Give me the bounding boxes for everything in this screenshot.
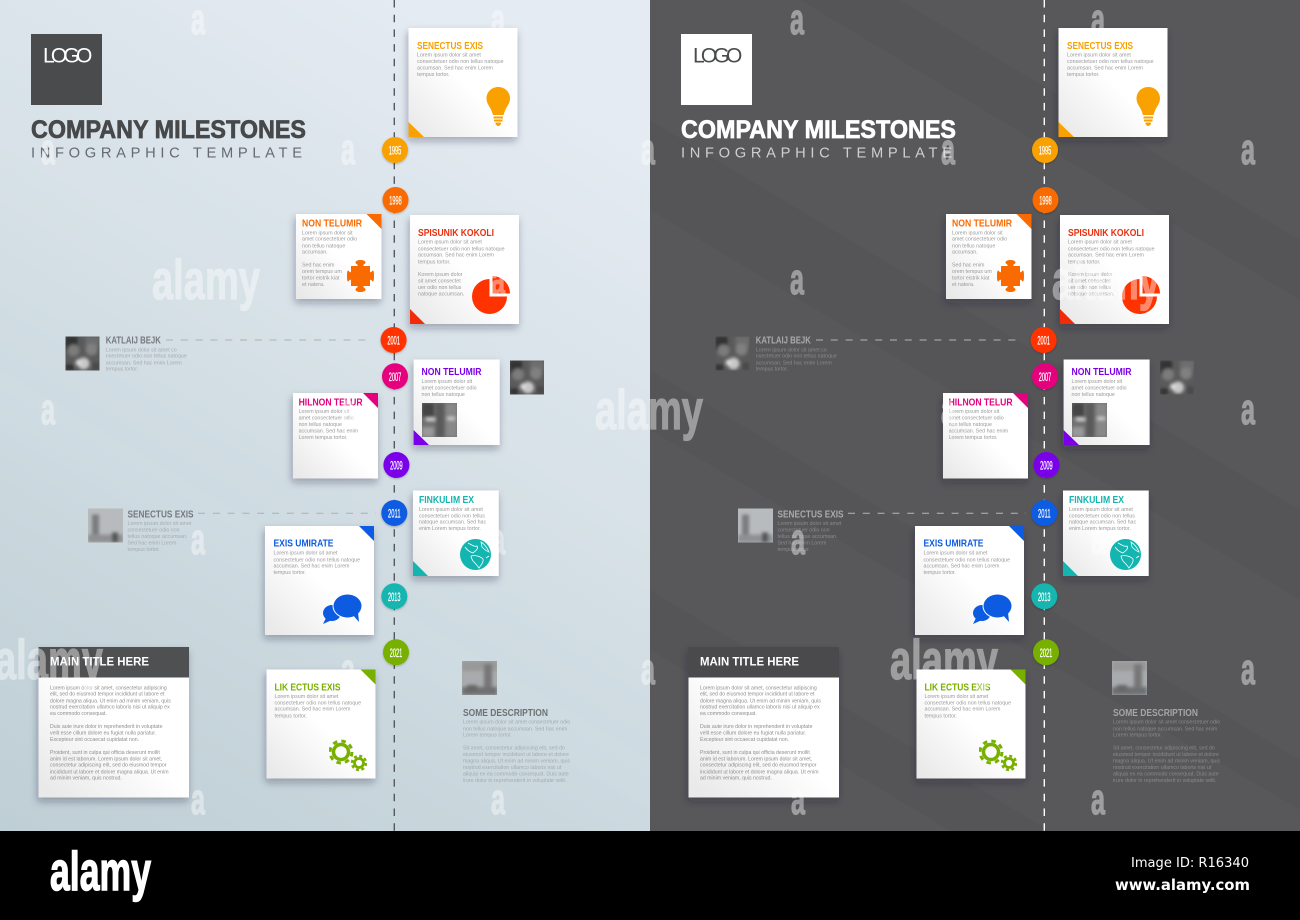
card: Non Telumir orange: NON TELUMIR [302, 218, 362, 230]
side note: Senectus Exis: tempus tortor. [128, 547, 160, 553]
card: Hilnon Telur dark: non tellus natoque [949, 422, 992, 428]
card: Non Telumir orange [296, 214, 382, 299]
card: Hilnon Telur: amet consectetuer odio [299, 416, 354, 422]
card: Spisunik Kokoli dark: consectetuer odio non tellus natoque [1068, 246, 1155, 252]
card: Exis Umirate dark: tempus tortor. [924, 570, 956, 576]
year 2001: 2001 [387, 336, 400, 348]
watermark overlay: a [491, 255, 505, 304]
watermark overlay: a [41, 385, 55, 434]
card: Lik Ectus Exis: accumsan. Sed hac enim Lorem [274, 707, 351, 713]
box: main title dark: ea commodo consequat. [700, 711, 757, 717]
icon: globe [460, 539, 491, 570]
side note: Some Description: aliquip ex ea commodo consequat. Duis aute [463, 771, 569, 777]
card: Senectus Exis dark: SENECTUS EXIS [1067, 40, 1133, 52]
year 2001 dark [1031, 327, 1057, 353]
card: Senectus Exis: Lorem ipsum dolor sit amet [417, 52, 481, 58]
year 1995 dark [1032, 137, 1058, 163]
card: Non Telumir orange: orem tempus um [302, 269, 342, 275]
card: Non Telumir orange dark: amet consectetuer odio [952, 237, 1007, 243]
side note: Some Description: SOME DESCRIPTION [463, 707, 548, 719]
card: Non Telumir orange: et natera. [302, 282, 324, 288]
box: main title: consectetur adipiscing elit, sed do eiusmod tempor [50, 763, 167, 769]
year 2013 [381, 583, 407, 609]
card: Hilnon Telur dark: accumsan. Sed hac enim [949, 428, 1009, 434]
watermark overlay: alamy [1052, 248, 1160, 311]
box: main title: ad minim veniam, quis nostrud. [50, 776, 122, 782]
card: Hilnon Telur dark [943, 393, 1028, 478]
box: main title: dolore magna aliqua. Ut enim ad minim veniam, quis [50, 698, 171, 704]
card: Exis Umirate: consectetuer odio non tellus natoque [274, 557, 360, 563]
watermark overlay: a [641, 645, 655, 694]
card: Non Telumir orange dark: Sed hac enim [952, 263, 985, 269]
box: main title dark: Excepteur sint occaecat cupidatat non. [700, 737, 789, 743]
card: Spisunik Kokoli: Korem ipsum dolor [418, 272, 463, 278]
year markers: dark [1031, 137, 1059, 665]
card: Spisunik Kokoli dark: uer odio non tellus [1068, 285, 1112, 291]
logo box: LOGO [43, 44, 92, 68]
subtitle: INFOGRAPHIC TEMPLATE [31, 146, 302, 162]
logo box dark [681, 34, 752, 105]
card: Finkulim Ex dark [1063, 490, 1149, 576]
card: Exis Umirate: accumsan. Sed hac enim Lorem [274, 564, 350, 570]
card: Finkulim Ex dark: enim Lorem tempus tortor. [1069, 526, 1131, 532]
card: Spisunik Kokoli: natoque accumsan. [418, 291, 464, 297]
box: main title dark: incididunt ut labore et dolore magna aliqua. Ut enim [700, 769, 819, 775]
card: Non Telumir orange dark: orem tempus um [952, 269, 992, 275]
icon: puzzle dark [997, 260, 1024, 292]
box: main title: Duis aute irure dolor in reprehenderit in voluptate [50, 724, 163, 730]
card: Spisunik Kokoli dark: sit amet consectet [1068, 279, 1111, 285]
watermark overlay: a [491, 775, 505, 824]
side note: Some Description: nostrud exercitation ullamco laboris nisi ut [463, 765, 562, 771]
watermark overlay: a [1241, 125, 1255, 174]
card: Hilnon Telur: HILNON TELUR [299, 397, 363, 409]
card: Senectus Exis: accumsan. Sed hac enim Lorem [417, 65, 494, 71]
side note: Senectus Exis: Sed hac enim Lorem [128, 541, 177, 547]
year 2007: 2007 [389, 372, 401, 384]
year 2011 dark [1031, 500, 1057, 526]
side note: Some Description dark: nostrud exercitation ullamco laboris nisi ut [1113, 765, 1212, 771]
side note: Katlaij Bejk: Lorem ipsum dolor sit amet co [106, 347, 177, 353]
connector: Katlaij [166, 339, 372, 341]
year 2001 [381, 327, 407, 353]
year 2011 dark: 2011 [1038, 508, 1051, 520]
side note: Some Description: Lorem tempus tortor. [463, 733, 512, 739]
timeline axis: light [393, 0, 395, 831]
side note: Katlaij Bejk dark [716, 334, 837, 373]
card: Senectus Exis: tempus tortor. [417, 72, 449, 78]
card: Exis Umirate dark: EXIS UMIRATE [924, 538, 984, 550]
side note: Some Description: non tellus natoque accumsan. Sed hac enim [463, 726, 568, 732]
year 1998 dark [1032, 187, 1058, 213]
side note: Katlaij Bejk dark: accumsan. Sed hac enim Lorem [756, 360, 832, 366]
card: Hilnon Telur: Lorem tempus tortor. [299, 435, 347, 441]
box: main title: Proident, sunt in culpa qui officia deserunt mollit [50, 750, 160, 756]
card: Senectus Exis: SENECTUS EXIS [417, 40, 483, 52]
card: Non Telumir orange dark: Lorem ipsum dolor sit [952, 230, 1003, 236]
card: Non Telumir purple [414, 360, 500, 445]
card: Spisunik Kokoli dark: natoque accumsan. [1068, 291, 1114, 297]
box: main title: ea commodo consequat. [50, 711, 107, 717]
side note: Some Description dark: eiusmod tempor incididunt ut labore et dolore [1113, 752, 1219, 758]
card: Hilnon Telur: Lorem ipsum dolor sit [299, 409, 350, 415]
watermark overlay: a [790, 255, 804, 304]
card: Non Telumir purple dark: NON TELUMIR [1072, 366, 1132, 378]
subtitle dark: INFOGRAPHIC TEMPLATE [681, 146, 952, 162]
card: Non Telumir purple dark [1064, 360, 1150, 445]
watermark overlay: a [1241, 385, 1255, 434]
card: Exis Umirate: Lorem ipsum dolor sit amet [274, 551, 338, 557]
year 2013 dark: 2013 [1038, 592, 1051, 604]
image id: Image ID: R16340 [1131, 855, 1249, 871]
box: main title: anim id est laborum. Lorem ipsum dolor sit amet, [50, 756, 162, 762]
box: main title dark: Lorem ipsum dolor sit amet, consectetur adipiscing [700, 685, 817, 691]
timeline axis: dark [1043, 0, 1045, 831]
card: Senectus Exis: consectetuer odio non tellus natoque [417, 59, 504, 65]
card: Spisunik Kokoli dark: Korem ipsum dolor [1068, 272, 1113, 278]
card: Spisunik Kokoli: uer odio non tellus [418, 285, 462, 291]
title dark: COMPANY MILESTONES [681, 116, 956, 144]
box: main title dark: consectetur adipiscing elit, sed do eiusmod tempor [700, 763, 817, 769]
watermark overlay: a [1091, 515, 1105, 564]
card: Finkulim Ex dark: Lorem ipsum dolor sit amet [1069, 507, 1133, 513]
year 2021: 2021 [390, 648, 402, 660]
card: Senectus Exis dark: Lorem ipsum dolor sit amet [1067, 52, 1131, 58]
card: Senectus Exis dark: tempus tortor. [1067, 72, 1099, 78]
year 2009 dark [1033, 452, 1059, 478]
card: Non Telumir orange dark: et natera. [952, 282, 974, 288]
side note: Senectus Exis dark: Lorem ipsum dolor sit amet [778, 521, 842, 527]
card: Spisunik Kokoli: Lorem ipsum dolor sit amet [418, 240, 482, 246]
website: www.alamy.com [1115, 876, 1250, 894]
side note: Senectus Exis dark: tellus natoque accumsan. [778, 534, 838, 540]
box: main title: velit esse cillum dolore eu fugiat nulla pariatur. [50, 731, 156, 737]
icon: gears [330, 741, 366, 770]
watermark overlay: a [791, 775, 805, 824]
year 2011: 2011 [388, 508, 401, 520]
card: Spisunik Kokoli: tempus tortor. [418, 259, 450, 265]
year 2009 [383, 452, 409, 478]
watermark overlay: a [941, 125, 955, 174]
year 1998: 1998 [389, 196, 402, 208]
side note: Katlaij Bejk [66, 334, 187, 373]
watermark overlay: a [491, 515, 505, 564]
infographic: dark version [681, 0, 1221, 831]
side note: Some Description [462, 661, 571, 784]
card: Spisunik Kokoli dark: accumsan. Sed hac enim Lorem [1068, 253, 1145, 259]
box: main title dark: MAIN TITLE HERE [700, 654, 799, 668]
watermark overlay: a [641, 125, 655, 174]
title: COMPANY MILESTONES [31, 116, 306, 144]
card: Lik Ectus Exis dark: tempus tortor. [924, 713, 957, 719]
side note: Senectus Exis dark: Sed hac enim Lorem [778, 541, 827, 547]
side note: Some Description dark: aliquip ex ea commodo consequat. Duis aute [1113, 771, 1219, 777]
watermark overlay: alamy [152, 248, 260, 311]
side note: Senectus Exis dark: tempus tortor. [778, 547, 810, 553]
watermark overlay: a [341, 385, 355, 434]
card: Spisunik Kokoli: SPISUNIK KOKOLI [418, 227, 494, 239]
side note: Senectus Exis [88, 508, 194, 553]
card: Non Telumir orange: Lorem ipsum dolor sit [302, 230, 353, 236]
card: Spisunik Kokoli dark: tempus tortor. [1068, 259, 1100, 265]
watermark overlay: a [1241, 645, 1255, 694]
card: Non Telumir orange dark [946, 214, 1032, 299]
year 1995 dark: 1995 [1039, 146, 1051, 158]
footer logo: alamy [50, 840, 151, 902]
card: Exis Umirate: EXIS UMIRATE [274, 538, 334, 550]
side note: Katlaij Bejk dark: KATLAIJ BEJK [756, 334, 811, 346]
icon: light bulb dark [1136, 87, 1160, 126]
card: Non Telumir purple dark: amet consectetuer odio [1072, 385, 1127, 391]
card: Hilnon Telur [293, 393, 378, 478]
icon: pie chart [472, 276, 510, 314]
year 1995: 1995 [389, 146, 401, 158]
icon: chat bubbles [323, 594, 362, 624]
year 1995 [382, 137, 408, 163]
box: main title dark: Duis aute irure dolor in reprehenderit in voluptate [700, 724, 813, 730]
watermark overlay: a [191, 515, 205, 564]
box: main title: incididunt ut labore et dolore magna aliqua. Ut enim [50, 769, 169, 775]
side note: Some Description dark: Lorem ipsum dolor sit amet consectetuer odio [1113, 720, 1220, 726]
card: Non Telumir orange: tortor eistrik kiat [302, 275, 340, 281]
card: Non Telumir orange dark: accumsan. [952, 250, 978, 256]
infographic: light version [31, 0, 571, 831]
card: Non Telumir purple dark: non tellus natoque [1072, 392, 1115, 398]
card: Hilnon Telur dark: Lorem tempus tortor. [949, 435, 997, 441]
card: Lik Ectus Exis dark: consectetuer odio non tellus natoque [924, 700, 1011, 706]
year 2001 dark: 2001 [1037, 336, 1050, 348]
card: Finkulim Ex: enim Lorem tempus tortor. [419, 526, 481, 532]
year 2021 dark: 2021 [1040, 648, 1052, 660]
year 2007 dark: 2007 [1039, 372, 1051, 384]
year 2021 dark [1033, 639, 1059, 665]
card: Lik Ectus Exis dark: accumsan. Sed hac enim Lorem [924, 707, 1001, 713]
box: main title: Excepteur sint occaecat cupidatat non. [50, 737, 139, 743]
icon: puzzle [347, 260, 374, 292]
logo box [31, 34, 102, 105]
card: Non Telumir orange dark: NON TELUMIR [952, 218, 1012, 230]
side note: Katlaij Bejk dark: nsectetuer odio non tellus natoque [756, 354, 837, 360]
card: Hilnon Telur dark: HILNON TELUR [949, 397, 1013, 409]
image placeholder [422, 403, 457, 437]
card: Non Telumir purple: NON TELUMIR [422, 366, 482, 378]
card: Exis Umirate dark: accumsan. Sed hac enim Lorem [924, 564, 1000, 570]
watermark overlay: a [941, 385, 955, 434]
card: Finkulim Ex [413, 490, 499, 576]
connector: Senectus [198, 512, 376, 514]
card: Spisunik Kokoli: consectetuer odio non tellus natoque [418, 246, 505, 252]
card: Lik Ectus Exis dark: LIK ECTUS EXIS [924, 681, 990, 693]
card: Non Telumir orange: amet consectetuer odio [302, 237, 357, 243]
box: main title dark: dolore magna aliqua. Ut enim ad minim veniam, quis [700, 698, 821, 704]
box: main title: Lorem ipsum dolor sit amet, consectetur adipiscing [50, 685, 167, 691]
panel: light version background [0, 0, 650, 831]
box: main title dark: Proident, sunt in culpa qui officia deserunt mollit [700, 750, 810, 756]
card: Senectus Exis dark: accumsan. Sed hac enim Lorem [1067, 65, 1144, 71]
card: Lik Ectus Exis dark: Lorem ipsum dolor sit amet [924, 694, 989, 700]
card: Non Telumir purple dark: Lorem ipsum dolor sit [1072, 379, 1123, 385]
card: Hilnon Telur dark: amet consectetuer odio [949, 416, 1004, 422]
card: Lik Ectus Exis dark [916, 670, 1026, 778]
card: Lik Ectus Exis: consectetuer odio non tellus natoque [274, 700, 361, 706]
watermark overlay: a [1091, 775, 1105, 824]
card: Finkulim Ex: consectetuer odio non tellus [419, 513, 485, 519]
card: Spisunik Kokoli dark: SPISUNIK KOKOLI [1068, 227, 1144, 239]
side note: Katlaij Bejk dark: Lorem ipsum dolor sit amet co [756, 347, 827, 353]
card: Lik Ectus Exis: tempus tortor. [274, 713, 307, 719]
card: Exis Umirate dark: consectetuer odio non tellus natoque [924, 557, 1010, 563]
card: Non Telumir orange dark: non tellus natoque [952, 243, 995, 249]
year 2009: 2009 [390, 460, 403, 472]
watermark overlay: a [791, 515, 805, 564]
card: Non Telumir orange: non tellus natoque [302, 243, 345, 249]
card: Finkulim Ex: natoque accumsan. Sed hac [419, 520, 486, 526]
side note: Katlaij Bejk: tempus tortor. [106, 367, 138, 373]
side note: Katlaij Bejk dark: tempus tortor. [756, 367, 788, 373]
year 2013: 2013 [388, 592, 401, 604]
watermark overlay: a [341, 645, 355, 694]
side note: Some Description dark: non tellus natoque accumsan. Sed hac enim [1113, 726, 1218, 732]
year 1998 dark: 1998 [1039, 196, 1052, 208]
card: Exis Umirate dark: Lorem ipsum dolor sit amet [924, 551, 988, 557]
watermark overlay: a [341, 125, 355, 174]
card: Exis Umirate: tempus tortor. [274, 570, 306, 576]
card: Senectus Exis dark: consectetuer odio non tellus natoque [1067, 59, 1154, 65]
side note: Senectus Exis: SENECTUS EXIS [128, 508, 194, 520]
card: Spisunik Kokoli [410, 215, 519, 324]
side note: Some Description: eiusmod tempor incididunt ut labore et dolore [463, 752, 569, 758]
icon: chat bubbles dark [973, 594, 1012, 624]
side note: Some Description: irure dolor in reprehenderit in voluptate velit. [463, 778, 566, 784]
icon: gears dark [980, 741, 1016, 770]
card: Spisunik Kokoli: sit amet consectet [418, 279, 461, 285]
side note: Some Description dark: Sit amet, consectetur adipiscing elit, sed do [1113, 746, 1215, 752]
side note: Some Description: magna aliqua. Ut enim ad minim veniam, quis [463, 759, 571, 765]
side note: Katlaij Bejk: accumsan. Sed hac enim Lorem [106, 360, 182, 366]
year 2011 [381, 500, 407, 526]
card: Senectus Exis [408, 28, 518, 137]
card: Non Telumir orange: accumsan. [302, 250, 328, 256]
card: Non Telumir purple: amet consectetuer odio [422, 385, 477, 391]
side note: Some Description dark: Lorem tempus tortor. [1113, 733, 1162, 739]
thumbnail dark [1160, 360, 1194, 394]
card: Spisunik Kokoli: accumsan. Sed hac enim Lorem [418, 253, 495, 259]
box: main title: elit, sed do eiusmod tempor incididunt ut labore et [50, 692, 165, 698]
card: Hilnon Telur: non tellus natoque [299, 422, 342, 428]
card: Finkulim Ex dark: FINKULIM EX [1069, 494, 1124, 506]
box: main title [38, 647, 189, 798]
card: Spisunik Kokoli dark: Lorem ipsum dolor sit amet [1068, 240, 1132, 246]
card: Finkulim Ex: FINKULIM EX [419, 494, 474, 506]
side note: Katlaij Bejk: nsectetuer odio non tellus natoque [106, 354, 187, 360]
side note: Some Description: Sit amet, consectetur adipiscing elit, sed do [463, 746, 565, 752]
box: main title dark: anim id est laborum. Lorem ipsum dolor sit amet, [700, 756, 812, 762]
watermark overlay: a [41, 125, 55, 174]
box: main title dark: velit esse cillum dolore eu fugiat nulla pariatur. [700, 731, 806, 737]
side note: Some Description dark [1112, 661, 1221, 784]
watermark overlay: alamy [595, 378, 703, 441]
panel: dark version background [650, 0, 1300, 831]
card: Lik Ectus Exis: LIK ECTUS EXIS [274, 681, 340, 693]
thumbnail [510, 360, 544, 394]
image placeholder dark [1072, 403, 1107, 437]
box: main title dark: ad minim veniam, quis nostrud. [700, 776, 772, 782]
side note: Katlaij Bejk: KATLAIJ BEJK [106, 334, 161, 346]
card: Non Telumir orange: Sed hac enim [302, 263, 335, 269]
card: Lik Ectus Exis: Lorem ipsum dolor sit amet [274, 694, 339, 700]
box: main title dark: nostrud exercitation ullamco laboris nisi ut aliquip ex [700, 705, 820, 711]
icon: light bulb [486, 87, 510, 126]
side note: Some Description: Lorem ipsum dolor sit amet consectetuer odio [463, 720, 570, 726]
side note: Senectus Exis: tellus natoque accumsan. [128, 534, 188, 540]
card: Non Telumir purple: Lorem ipsum dolor sit [422, 379, 473, 385]
card: Finkulim Ex dark: consectetuer odio non tellus [1069, 513, 1135, 519]
icon: globe dark [1110, 539, 1141, 570]
side note: Senectus Exis dark [738, 508, 844, 553]
side note: Senectus Exis dark: consectetuer odio non [778, 528, 830, 534]
year 2007 [382, 363, 408, 389]
watermark overlay: a [191, 775, 205, 824]
side note: Some Description dark: magna aliqua. Ut enim ad minim veniam, quis [1113, 759, 1221, 765]
year 2007 dark [1032, 363, 1058, 389]
card: Non Telumir orange dark: tortor eistrik kiat [952, 275, 990, 281]
connector: Katlaij dark [816, 339, 1022, 341]
year 2013 dark [1031, 583, 1057, 609]
side note: Senectus Exis dark: SENECTUS EXIS [778, 508, 844, 520]
side note: Some Description dark: SOME DESCRIPTION [1113, 707, 1198, 719]
card: Spisunik Kokoli dark [1060, 215, 1169, 324]
card: Hilnon Telur: accumsan. Sed hac enim [299, 428, 359, 434]
card: Lik Ectus Exis [266, 670, 376, 778]
icon: pie chart dark [1122, 276, 1160, 314]
watermark overlay: alamy [890, 628, 998, 691]
box: main title: MAIN TITLE HERE [50, 654, 149, 668]
card: Exis Umirate [265, 526, 374, 635]
card: Finkulim Ex dark: natoque accumsan. Sed hac [1069, 520, 1136, 526]
connector: Senectus dark [848, 512, 1026, 514]
box: main title dark [688, 647, 839, 798]
side note: Some Description dark: irure dolor in reprehenderit in voluptate velit. [1113, 778, 1216, 784]
year 2009 dark: 2009 [1040, 460, 1053, 472]
box: main title: nostrud exercitation ullamco laboris nisi ut aliquip ex [50, 705, 170, 711]
logo box dark: LOGO [693, 44, 742, 68]
card: Senectus Exis dark [1058, 28, 1168, 137]
side note: Senectus Exis: consectetuer odio non [128, 528, 180, 534]
year markers: light [381, 137, 409, 665]
year 2021 [383, 639, 409, 665]
card: Non Telumir purple: non tellus natoque [422, 392, 465, 398]
card: Finkulim Ex: Lorem ipsum dolor sit amet [419, 507, 483, 513]
card: Hilnon Telur dark: Lorem ipsum dolor sit [949, 409, 1000, 415]
year 1998 [382, 187, 408, 213]
side note: Senectus Exis: Lorem ipsum dolor sit amet [128, 521, 192, 527]
footer bar [0, 831, 1300, 920]
box: main title dark: elit, sed do eiusmod tempor incididunt ut labore et [700, 692, 815, 698]
card: Exis Umirate dark [915, 526, 1024, 635]
